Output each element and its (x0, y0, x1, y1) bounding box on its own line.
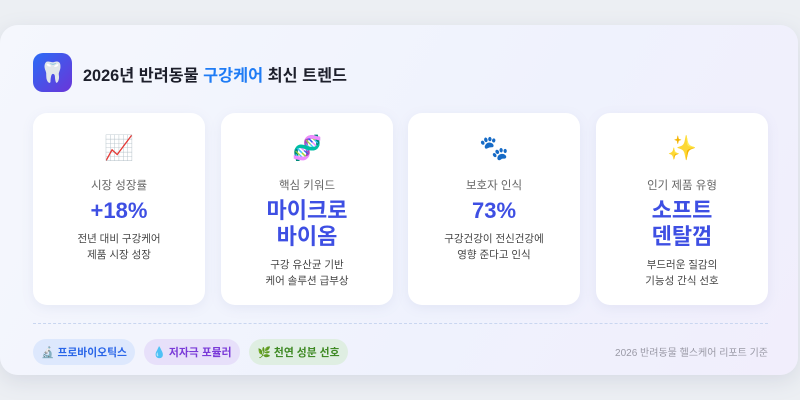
value: 마이크로 (267, 198, 347, 223)
label: 핵심 키워드 (279, 180, 335, 192)
chip: probiotics: 🔬 프로바이오틱스 (41, 347, 127, 359)
card: product type (596, 113, 768, 305)
value (652, 198, 712, 249)
chip: natural (249, 339, 348, 365)
title: 2026년 반려동물 구강케어 최신 트렌드 (83, 67, 347, 85)
chip: hypoallergenic (144, 339, 240, 365)
description (645, 259, 719, 287)
icon: tooth (33, 53, 72, 92)
label: 시장 성장률 (91, 180, 147, 192)
description (444, 233, 544, 261)
chip: natural: 🌿 천연 성분 선호 (257, 347, 340, 359)
chip: probiotics (33, 339, 135, 365)
description: 전년 대비 구강케어 (77, 233, 161, 245)
description (265, 259, 349, 287)
description (77, 233, 161, 261)
description: 기능성 간식 선호 (645, 275, 719, 287)
description: 제품 시장 성장 (87, 249, 151, 261)
description: 구강건강이 전신건강에 (444, 233, 544, 245)
label: 보호자 인식 (466, 180, 522, 192)
chip: hypoallergenic: 💧 저자극 포뮬러 (152, 347, 232, 359)
value: 덴탈껌 (652, 224, 712, 249)
label: 인기 제품 유형 (647, 180, 717, 192)
value (267, 198, 347, 249)
value: 소프트 (652, 198, 712, 223)
icon: tooth: 🦷 (40, 62, 65, 84)
value: 바이옴 (277, 224, 337, 249)
value: 73% (472, 198, 516, 223)
icon: chart: 📈 (104, 135, 134, 162)
description: 케어 솔루션 급부상 (265, 275, 349, 287)
icon: paws: 🐾 (479, 135, 509, 162)
description: 구강 유산균 기반 (270, 259, 344, 271)
card: market growth (33, 113, 205, 305)
source note: 2026 반려동물 헬스케어 리포트 기준 (615, 348, 768, 359)
description: 영향 준다고 인식 (457, 249, 531, 261)
icon: sparkles: ✨ (667, 135, 697, 162)
icon: dna: 🧬 (292, 135, 322, 162)
card: keyword (221, 113, 393, 305)
card: awareness (408, 113, 580, 305)
description: 부드러운 질감의 (647, 259, 717, 271)
value: +18% (91, 198, 147, 223)
